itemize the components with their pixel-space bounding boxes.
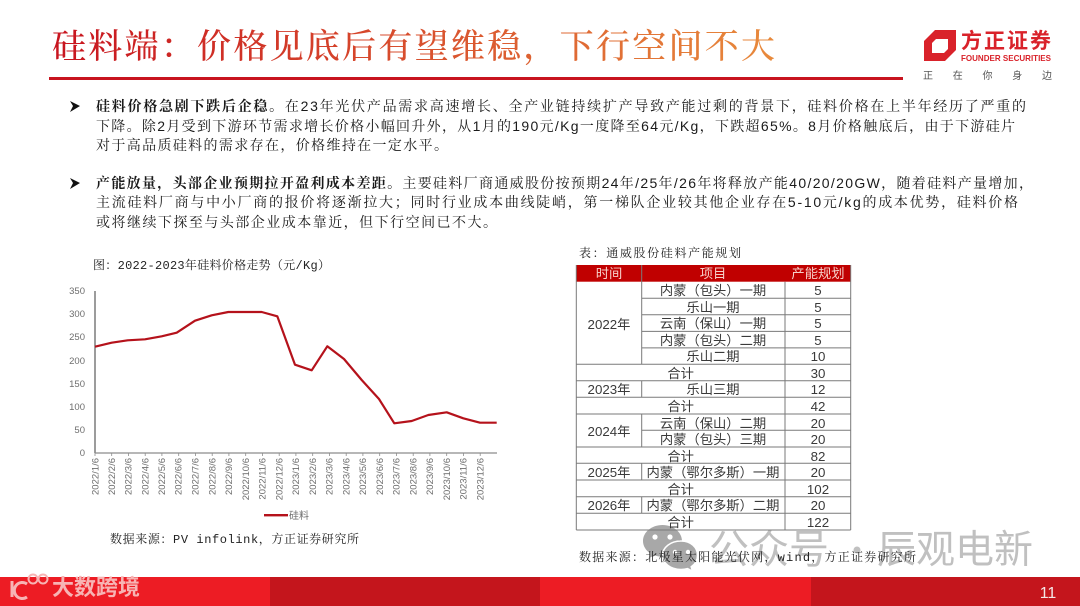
logo: Founder Securities bbox=[923, 29, 1052, 82]
table capacity values: 102 bbox=[807, 482, 829, 497]
bullet text: 对于高品质硅料的需求存在，价格维持在一定水平。 bbox=[96, 137, 448, 154]
table capacity values: 12 bbox=[811, 382, 825, 397]
y axis labels: 0 bbox=[80, 448, 85, 459]
text block: capacity bullet bbox=[70, 175, 1033, 231]
x axis labels: 2023/9/6 bbox=[425, 458, 436, 495]
x axis labels: 2023/8/6 bbox=[408, 458, 420, 495]
table: Tongwei capacity plan bbox=[576, 265, 851, 530]
table capacity values: 20 bbox=[811, 416, 825, 431]
table year cells bbox=[588, 317, 630, 513]
bullet text: 或将继续下探至与头部企业成本靠近，但下行空间已不大。 bbox=[96, 214, 497, 231]
y axis labels: 300 bbox=[69, 309, 85, 320]
title rule bbox=[49, 77, 903, 80]
line chart: silicon price bbox=[69, 286, 497, 522]
watermark label: 大数跨境 bbox=[52, 575, 140, 600]
icon: bullet arrow bbox=[70, 178, 80, 189]
chart source: 数据来源：PV infolink，方正证券研究所 bbox=[110, 531, 359, 547]
table capacity values: 5 bbox=[814, 333, 822, 348]
table header: 产能规划 bbox=[791, 266, 845, 281]
price line bbox=[95, 312, 497, 423]
icon: WeChat bubbles bbox=[643, 525, 698, 571]
table project cells: 内蒙（包头）二期 bbox=[660, 333, 766, 348]
table capacity values: 20 bbox=[811, 498, 825, 513]
x axis labels: 2023/3/6 bbox=[324, 458, 336, 495]
watermark text bbox=[709, 528, 1033, 572]
x axis labels: 2022/9/6 bbox=[224, 458, 235, 495]
x axis labels: 2023/11/6 bbox=[458, 458, 470, 500]
chart heading: 图：2022-2023年硅料价格走势（元/Kg） bbox=[93, 257, 330, 273]
watermark text: 公众号 bbox=[709, 528, 829, 572]
text block: price bullet bbox=[70, 98, 1026, 154]
logo slogan: 正在你身边 bbox=[923, 69, 1052, 82]
table capacity values: 82 bbox=[811, 449, 825, 464]
bullet text: 下降。除2月受到下游环节需求增长价格小幅回升外，从1月的190元/Kg一度降至64元/Kg，下跌超65%。8月价格触底后，由于下游硅片 bbox=[96, 118, 1015, 135]
icon: bullet arrow bbox=[70, 101, 80, 112]
y axis labels: 350 bbox=[69, 286, 85, 297]
table header bbox=[576, 265, 851, 282]
table project cells: 内蒙（鄂尔多斯）二期 bbox=[647, 497, 779, 513]
logo english name: FOUNDER SECURITIES bbox=[961, 53, 1051, 63]
x axis labels: 2023/6/6 bbox=[375, 458, 386, 495]
table capacity values: 122 bbox=[807, 515, 829, 530]
y axis labels: 200 bbox=[69, 356, 85, 367]
table project cells: 内蒙（包头）三期 bbox=[660, 432, 766, 447]
table header: 时间 bbox=[596, 266, 622, 281]
x axis labels: 2022/3/6 bbox=[124, 458, 134, 495]
x axis labels: 2023/7/6 bbox=[392, 458, 402, 495]
x axis labels: 2022/1/6 bbox=[90, 458, 102, 495]
table project cells: 内蒙（鄂尔多斯）一期 bbox=[647, 464, 779, 480]
axes bbox=[95, 291, 497, 456]
table project cells: 云南（保山）一期 bbox=[660, 316, 766, 331]
footer bar bbox=[0, 577, 1080, 606]
table year cells: 2024年 bbox=[588, 424, 630, 439]
x axis labels: 2022/10/6 bbox=[241, 458, 252, 500]
watermark: 100 big data cross-border bbox=[12, 574, 140, 600]
table capacity values: 20 bbox=[811, 465, 825, 480]
table capacity values: 30 bbox=[811, 366, 825, 381]
icon: 100 logo bbox=[12, 574, 48, 598]
table year cells: 2026年 bbox=[588, 498, 630, 513]
table capacity values: 5 bbox=[814, 283, 822, 298]
watermark: WeChat account bbox=[643, 525, 1033, 572]
table project cells: 合计 bbox=[667, 399, 694, 414]
table source: 数据来源：北极星太阳能光伏网，wind，方正证券研究所 bbox=[579, 549, 916, 565]
table capacity values: 42 bbox=[811, 399, 825, 414]
table project cells: 合计 bbox=[667, 449, 694, 464]
table capacity values: 20 bbox=[811, 432, 825, 447]
x axis labels: 2022/5/6 bbox=[157, 458, 168, 495]
table caption: 表：通威股份硅料产能规划 bbox=[579, 245, 741, 261]
legend: 硅料 bbox=[289, 509, 309, 522]
x axis labels: 2022/8/6 bbox=[208, 458, 218, 495]
bullet text bbox=[96, 175, 1033, 231]
bullet text: 产能放量，头部企业预期拉开盈利成本差距。主要硅料厂商通威股份按预期24年/25年/26年将释放产能40/20/20GW，随着硅料产量增加， bbox=[96, 175, 1033, 192]
bullet text: 主流硅料厂商与中小厂商的报价将逐渐拉大；同时行业成本曲线陡峭，第一梯队企业较其他企业存在5-10元/kg的成本优势，硅料价格 bbox=[96, 194, 1018, 211]
y axis labels: 150 bbox=[69, 379, 85, 390]
table project cells: 合计 bbox=[667, 366, 694, 381]
table project cells: 内蒙（包头）一期 bbox=[660, 283, 766, 298]
x axis labels: 2023/10/6 bbox=[442, 458, 453, 500]
y axis labels bbox=[69, 286, 85, 459]
table project cells: 乐山二期 bbox=[686, 349, 740, 364]
table capacity values bbox=[807, 283, 829, 530]
table header: 项目 bbox=[700, 266, 726, 281]
x axis labels: 2022/11/6 bbox=[258, 458, 268, 500]
x axis labels bbox=[90, 458, 486, 500]
x axis labels: 2023/12/6 bbox=[476, 458, 486, 500]
y axis labels: 250 bbox=[69, 332, 85, 343]
title: 硅料端：价格见底后有望维稳，下行空间不大 bbox=[52, 28, 775, 66]
table year cells: 2025年 bbox=[588, 465, 630, 480]
table project cells: 云南（保山）二期 bbox=[660, 416, 766, 431]
x axis labels: 2023/2/6 bbox=[308, 458, 319, 495]
y axis labels: 100 bbox=[69, 402, 85, 413]
x axis labels: 2023/4/6 bbox=[342, 458, 352, 495]
x axis labels: 2022/12/6 bbox=[274, 458, 286, 500]
table capacity values: 5 bbox=[814, 316, 822, 331]
table year cells: 2022年 bbox=[588, 317, 630, 332]
legend bbox=[264, 509, 309, 522]
x axis labels: 2023/5/6 bbox=[358, 458, 369, 495]
logo name: 方正证券 bbox=[961, 29, 1051, 53]
table project cells: 乐山三期 bbox=[686, 382, 740, 397]
y axis labels: 50 bbox=[74, 425, 85, 436]
icon: logo mark bbox=[924, 30, 956, 61]
table project cells: 合计 bbox=[667, 482, 694, 497]
x axis labels: 2022/2/6 bbox=[107, 458, 118, 495]
table year cells: 2023年 bbox=[588, 382, 630, 397]
table capacity values: 10 bbox=[811, 349, 825, 364]
x axis labels: 2022/6/6 bbox=[174, 458, 184, 495]
x axis labels: 2023/1/6 bbox=[291, 458, 302, 495]
table capacity values: 5 bbox=[814, 300, 822, 315]
table project cells: 乐山一期 bbox=[686, 300, 740, 315]
bullet text bbox=[96, 98, 1026, 154]
watermark text: 辰观电新 bbox=[877, 529, 1033, 572]
table grid bbox=[576, 265, 851, 530]
table project cells: 合计 bbox=[667, 515, 694, 530]
x axis labels: 2022/4/6 bbox=[140, 458, 152, 495]
page number: 11 bbox=[1040, 585, 1056, 602]
x axis labels: 2022/7/6 bbox=[190, 458, 202, 495]
bullet text: 硅料价格急剧下跌后企稳。在23年光伏产品需求高速增长、全产业链持续扩产导致产能过剩的背景下，硅料价格在上半年经历了严重的 bbox=[96, 98, 1026, 115]
table project cells bbox=[647, 283, 779, 530]
